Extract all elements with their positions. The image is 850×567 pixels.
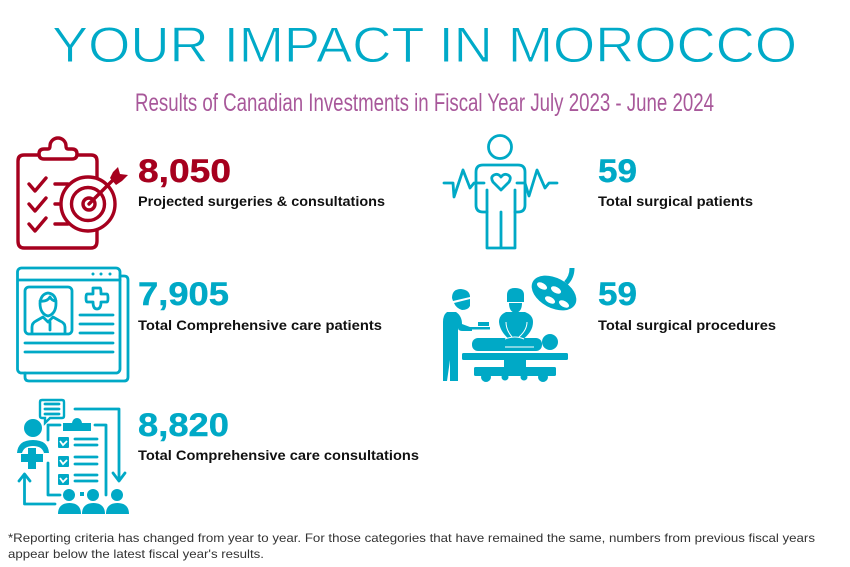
footnote: *Reporting criteria has changed from year to year. For those categories that have remained the same, numbers from previous fiscal years: [8, 531, 815, 545]
stat: projected surgeries: [138, 153, 385, 209]
icon: care team and clipboard: [17, 400, 129, 514]
stat: comprehensive patients: 7,905: [138, 276, 229, 312]
icon: surgical team and operating table: [443, 268, 582, 382]
title: YOUR IMPACT IN MOROCCO: [52, 17, 797, 73]
stat: surgical procedures: Total surgical procedures: [598, 318, 776, 333]
stat: comprehensive consultations: [138, 407, 419, 463]
stat: projected surgeries: Projected surgeries & consultations: [138, 194, 385, 209]
stat: projected surgeries: 8,050: [138, 153, 231, 189]
icon: person with heartbeat: [444, 136, 557, 248]
stat: surgical procedures: 59: [598, 276, 637, 312]
stat: comprehensive patients: Total Comprehensive care patients: [138, 318, 382, 333]
stat: comprehensive patients: [138, 276, 382, 333]
icon: patient record window: [18, 268, 128, 381]
stat: surgical patients: 59: [598, 153, 637, 189]
footnote: appear below the latest fiscal year's results.: [8, 547, 264, 561]
stat: comprehensive consultations: 8,820: [138, 407, 229, 443]
icon: clipboard with target: [18, 138, 128, 248]
stat: surgical patients: [598, 153, 753, 209]
stat: comprehensive consultations: Total Comprehensive care consultations: [138, 448, 419, 463]
stat: surgical procedures: [598, 276, 776, 333]
stat: surgical patients: Total surgical patients: [598, 194, 753, 209]
footnote: [8, 531, 815, 561]
